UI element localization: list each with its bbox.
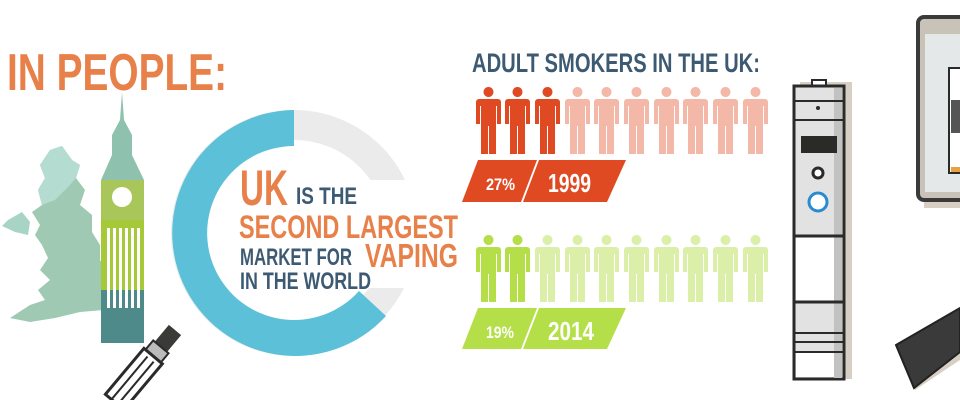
icon: tablet device: [918, 17, 960, 208]
donut chart: [172, 110, 402, 356]
text block: UK second largest: MARKET FOR: [240, 244, 352, 271]
icon: e-cig pen: [105, 322, 184, 400]
banner: 27% 1999: 1999: [548, 168, 591, 198]
banner: 19% 2014: [462, 308, 626, 349]
title: IN PEOPLE:: [7, 44, 227, 102]
heading: adult smokers: ADULT SMOKERS IN THE UK:: [472, 48, 760, 78]
text block: UK second largest: UK: [240, 160, 288, 216]
banner: 19% 2014: 19%: [486, 323, 514, 342]
text block: UK second largest: SECOND LARGEST: [239, 209, 458, 245]
icon: UK map: [2, 146, 112, 322]
icon: dark box: [896, 308, 960, 390]
text block: UK second largest: VAPING: [365, 237, 458, 274]
banner: 19% 2014: 2014: [548, 316, 594, 346]
text block: UK second largest: IS THE: [296, 183, 357, 210]
icon: Big Ben: [101, 92, 144, 343]
text block: UK second largest: [239, 160, 462, 295]
banner: 27% 1999: [462, 160, 626, 202]
icon: vape mod device: [794, 80, 852, 379]
banner: 27% 1999: 27%: [486, 175, 515, 194]
pictogram: 1999: [476, 87, 768, 154]
text block: UK second largest: IN THE WORLD: [240, 268, 371, 295]
pictogram: 2014: [476, 235, 768, 302]
